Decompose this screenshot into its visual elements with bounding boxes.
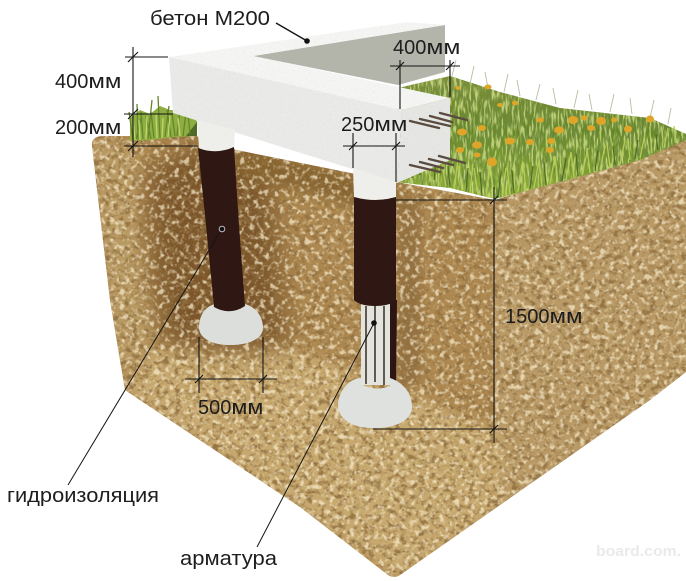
soil block bbox=[85, 130, 686, 581]
left column: waterproofing bbox=[198, 147, 245, 311]
right column: exposed core bbox=[361, 300, 396, 385]
right column: waterproofing bbox=[354, 197, 396, 306]
label: гидроизоляция: гидроизоляция bbox=[7, 485, 159, 507]
right column: footing bbox=[338, 378, 412, 428]
beam: back arm inner face bbox=[253, 25, 445, 85]
left column bbox=[197, 120, 263, 345]
label: 250мм: 250мм bbox=[341, 114, 407, 136]
left column: concrete top bbox=[197, 120, 235, 152]
soil: left band bbox=[92, 137, 154, 380]
dimension lines bbox=[124, 47, 507, 443]
soil: shadow under beam bbox=[234, 149, 398, 209]
left column: footing bbox=[199, 304, 263, 345]
leader: арматура bbox=[257, 320, 377, 547]
label: 1500мм: 1500мм bbox=[505, 306, 582, 328]
rebar ends bbox=[410, 113, 467, 172]
dimension: column width bbox=[343, 133, 405, 182]
label: 200мм: 200мм bbox=[55, 117, 121, 139]
beam: top face bbox=[169, 22, 450, 110]
right column: concrete top bbox=[353, 168, 396, 200]
leader: гидроизоляция bbox=[68, 226, 225, 485]
soil: lit floor bbox=[125, 345, 500, 580]
grass: blades on the top edge bbox=[452, 60, 671, 124]
dimension: beam height and plinth bbox=[124, 47, 198, 157]
right column: rebar inside bbox=[366, 306, 384, 385]
dimension: footing width bbox=[185, 337, 277, 393]
grass: blades along the lower edge bbox=[426, 126, 676, 198]
beam: front face bbox=[169, 57, 402, 183]
left grass patch bbox=[129, 96, 197, 141]
flowers bbox=[440, 84, 654, 166]
leader: бетон bbox=[276, 23, 310, 44]
soil: light texture bbox=[85, 130, 686, 581]
watermark: board.com. bbox=[596, 543, 681, 560]
label: 400мм left: 400мм bbox=[55, 71, 121, 93]
dimension: column depth bbox=[373, 187, 507, 443]
soil: dark texture bbox=[85, 130, 686, 581]
concrete beam bbox=[165, 20, 455, 185]
soil: shadowed trench bbox=[146, 145, 288, 352]
right grass field bbox=[395, 60, 686, 205]
label: арматура: арматура bbox=[180, 548, 278, 570]
label: 500мм: 500мм bbox=[198, 397, 263, 419]
beam: end face bbox=[397, 98, 450, 183]
soil: shadow behind right column bbox=[396, 190, 422, 390]
label: бетон М200: бетон М200 bbox=[150, 8, 270, 30]
label: 400мм right: 400мм bbox=[393, 37, 460, 59]
right column bbox=[338, 168, 412, 428]
soil: right face bbox=[495, 140, 686, 510]
dimension: beam width bbox=[390, 60, 460, 109]
